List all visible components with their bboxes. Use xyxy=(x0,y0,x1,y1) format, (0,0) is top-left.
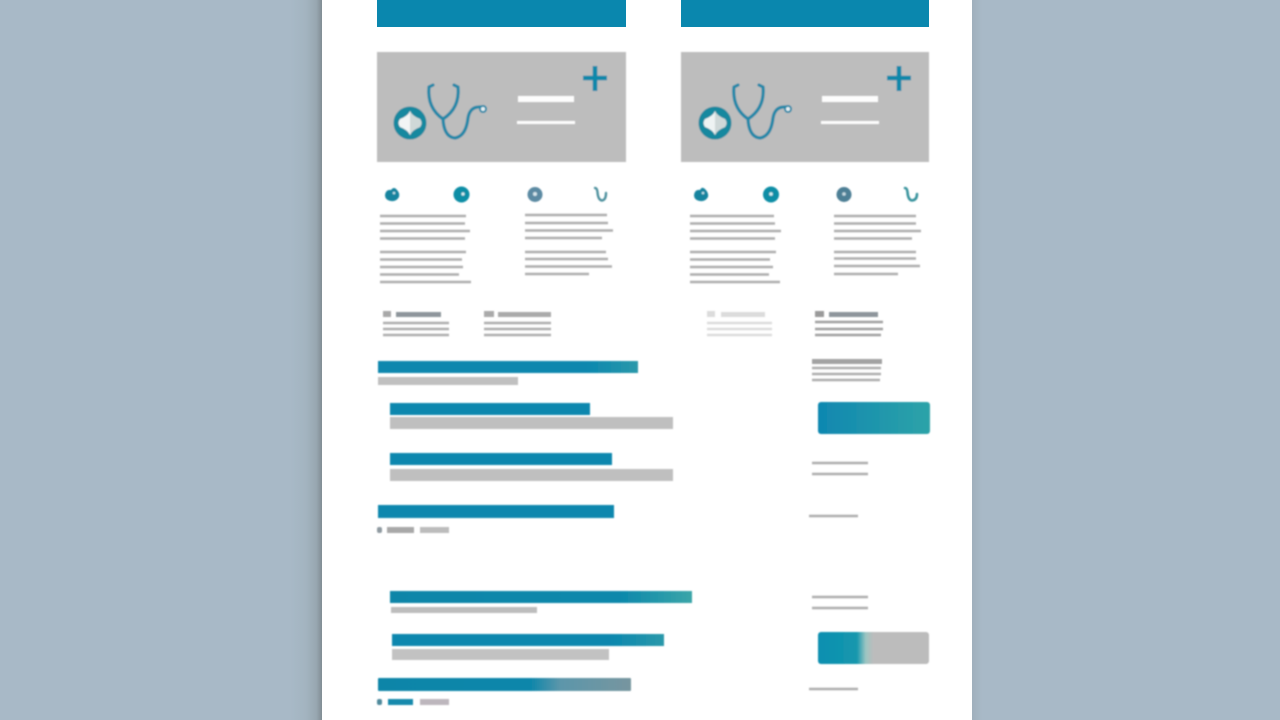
note lines xyxy=(812,597,868,608)
text block: column four xyxy=(834,216,921,274)
teal bar two xyxy=(390,453,612,465)
progress button xyxy=(818,632,929,664)
white document page xyxy=(322,0,972,720)
teal bar one xyxy=(390,403,590,415)
right header bar xyxy=(681,0,929,27)
icon: dot one xyxy=(385,188,399,201)
gray bar one xyxy=(390,417,673,429)
sub-block: right faded xyxy=(707,311,772,335)
panel: left stethoscope banner xyxy=(377,52,626,162)
panel: right stethoscope banner xyxy=(681,52,929,162)
text placeholders xyxy=(821,96,879,124)
text block: column three xyxy=(690,216,781,282)
icon: heart circle xyxy=(698,106,732,140)
icon: stethoscope xyxy=(734,85,791,138)
section heading bar three xyxy=(378,678,631,691)
icon: heart circle xyxy=(394,106,426,140)
icon: plus xyxy=(583,66,607,91)
icon: stethoscope xyxy=(429,85,486,138)
text block: column one xyxy=(380,216,471,282)
tag row one xyxy=(377,527,449,533)
icon: plus xyxy=(887,66,911,91)
gray bar four xyxy=(392,649,609,660)
gray bar three xyxy=(391,607,537,613)
text placeholders xyxy=(517,96,575,124)
icon row: left columns xyxy=(385,186,606,202)
gray bar two xyxy=(390,469,673,481)
icon: dot two xyxy=(763,186,779,202)
note lines xyxy=(809,463,868,516)
subheading bar xyxy=(378,377,518,385)
icon: dot three xyxy=(836,187,852,202)
tag row two xyxy=(377,699,449,705)
icon: dot two xyxy=(454,186,470,202)
icon: dot one xyxy=(694,188,708,201)
text block: column two xyxy=(525,215,613,274)
section heading bar two xyxy=(378,505,614,518)
icon: hook xyxy=(905,188,917,200)
sub-block: right lower xyxy=(812,359,882,380)
icon row: right columns xyxy=(694,186,917,202)
sub-block: left two xyxy=(484,311,551,335)
teal bar three xyxy=(390,591,692,603)
section heading bar xyxy=(378,361,638,373)
bars: upper section xyxy=(377,361,673,533)
bars: lower section xyxy=(377,591,692,705)
teal bar four xyxy=(392,634,664,646)
right column: upper button and notes xyxy=(809,402,930,516)
sub-block: right dark xyxy=(815,311,883,335)
note line xyxy=(809,688,858,690)
icon: dot three xyxy=(528,187,542,202)
icon: hook xyxy=(595,188,606,200)
sub-block: left one xyxy=(383,311,449,335)
button xyxy=(818,402,930,434)
right column: lower button and notes xyxy=(809,597,929,689)
left header bar xyxy=(377,0,626,27)
